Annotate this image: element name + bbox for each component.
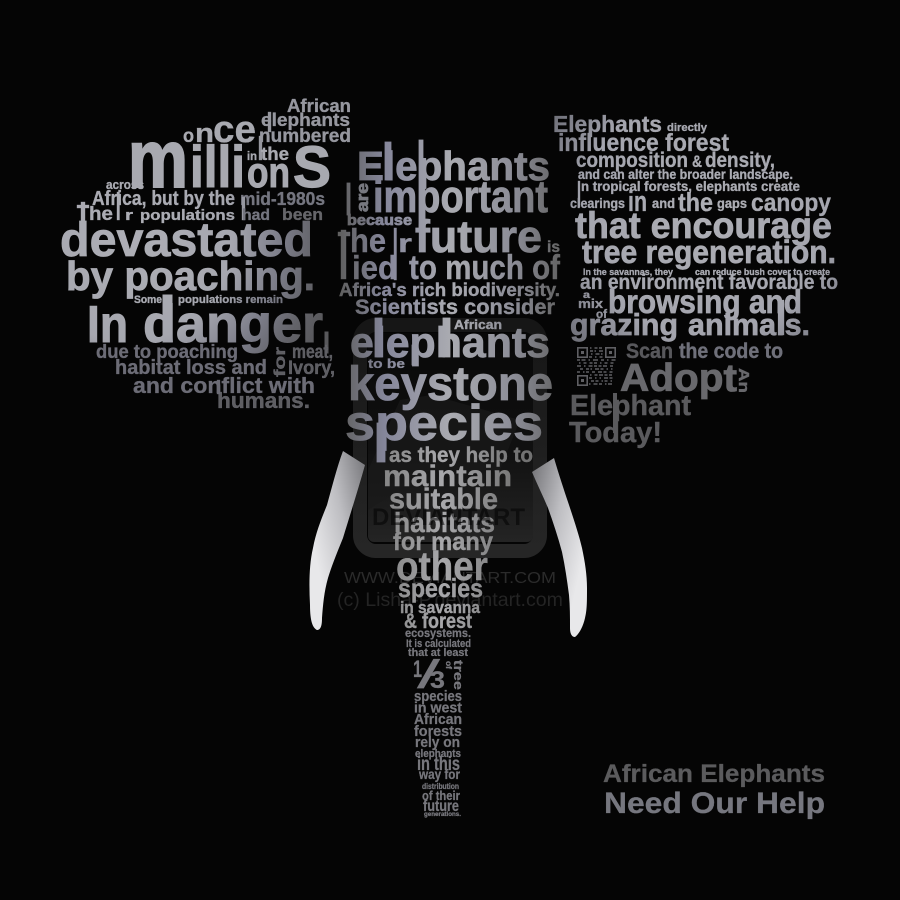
text: composition & density [576, 149, 800, 207]
headline: that encourage tree regeneration [575, 205, 836, 270]
panel: head text [338, 140, 561, 462]
figure: one third of tree: / [417, 653, 442, 697]
text: across Africa, but by the mid-1980s: mid-1980s [240, 189, 325, 209]
headline: elephants to be keystone species: to be [368, 356, 405, 371]
headline: a mix of browsing and grazing animals: browsing and [608, 283, 802, 320]
text: Africa's rich biodiversity. Scientists consider: African [454, 317, 502, 332]
text: elephants in this way for distribution of their future generations: in this [417, 754, 460, 775]
text: ecosystems. It is calculated that at least: ecosystems. [405, 626, 471, 640]
text: across Africa, but by the mid-1980s: Africa, but by the [92, 188, 235, 210]
headline: a mix of browsing and grazing animals [570, 283, 810, 342]
figure: one third of tree: of [444, 661, 453, 669]
headline: devastated by poaching: devastated [60, 214, 313, 267]
text: Some populations remain: Some [134, 294, 162, 306]
headline: that encourage tree regeneration: that encourage [575, 205, 832, 246]
headline: a mix of browsing and grazing animals: of [596, 307, 608, 321]
headline: Adopt An Elephant Today [569, 357, 752, 449]
headline: that encourage tree regeneration: tree regeneration. [582, 234, 836, 270]
heading: Elephants directly influence forest: influence forest [558, 129, 730, 157]
headline: a mix of browsing and grazing animals: mix [578, 296, 604, 311]
headline: once millions [128, 109, 331, 205]
headline: Adopt An Elephant Today: Today! [569, 417, 662, 449]
text: composition & density: composition [576, 149, 688, 172]
headline: a mix of browsing and grazing animals: grazing [570, 307, 678, 342]
heading: Elephants directly influence forest: directly [667, 122, 708, 134]
heading: African elephants numbered: numbered [259, 126, 351, 147]
headline: their future is tied to much of: ied [352, 249, 397, 286]
text: ecosystems. It is calculated that at least [405, 626, 471, 659]
headline: elephants to be keystone species [345, 318, 553, 462]
headline: once millions: n [195, 118, 214, 148]
headline: Elephants are important: are [353, 183, 372, 212]
headline: their future is tied to much of [338, 211, 561, 287]
headline: a mix of browsing and grazing animals: animals. [688, 307, 810, 342]
text: as they help to maintain suitable habitats: habitats [394, 507, 495, 538]
headline: elephants to be keystone species: keystone [348, 358, 553, 411]
headline: Elephants are important [347, 140, 550, 232]
figure: one third of tree: 3 [430, 667, 445, 694]
headline: once millions: the [261, 144, 289, 164]
headline: In danger: danger [143, 295, 323, 354]
text: clearings in and the gaps canopy [570, 186, 831, 218]
text: species in west African forests rely on: species [414, 688, 462, 705]
panel: left ear text [60, 96, 351, 413]
text: in savanna & forest [400, 598, 480, 633]
text: composition & density: & [692, 152, 702, 171]
headline: Adopt An Elephant Today: An [735, 368, 752, 393]
text: clearings in and the gaps canopy: gaps [717, 195, 747, 211]
text: clearings in and the gaps canopy: in [628, 186, 647, 218]
footer: call to action: Need Our Help [604, 787, 825, 820]
text: species in west African forests rely on: forests [414, 723, 462, 740]
headline: their future is tied to much of: r [398, 228, 412, 258]
text: Africa's rich biodiversity. Scientists consider: Scientists consider [355, 296, 555, 319]
headline: once millions: m [128, 114, 188, 205]
headline: Adopt An Elephant Today: Elephant [570, 390, 691, 422]
text: composition & density: n tropical forests, elephants create [581, 178, 800, 194]
headline: other species: other [396, 543, 488, 589]
text: across Africa, but by the mid-1980s [92, 177, 325, 210]
text: elephants in this way for distribution of their future generations: generations. [424, 812, 461, 818]
headline: once millions: in [247, 149, 257, 163]
text: as they help to maintain suitable habitats: for many [393, 528, 493, 556]
text: ecosystems. It is calculated that at least: It is calculated [406, 638, 471, 650]
headline: devastated by poaching [60, 214, 315, 299]
text: In the savannas, they can reduce bush cover: can reduce bush cover to create [695, 267, 830, 278]
figure: one third of tree: tree [451, 660, 466, 690]
text: across Africa, but by the mid-1980s: across [106, 177, 144, 192]
headline: Elephants are important: important [373, 171, 548, 222]
text: due to poaching for meat, ivory: Ivory, [288, 358, 335, 379]
right tusk [532, 458, 587, 637]
heading: Elephants directly influence forest [553, 111, 730, 157]
watermark url text [337, 570, 563, 611]
text: due to poaching for meat, ivory: meat, [292, 342, 333, 363]
text: their populations had been: had [242, 207, 270, 224]
footer: call to action [603, 760, 825, 820]
text: elephants in this way for distribution of their future generations: future [423, 798, 459, 815]
text: Africa's rich biodiversity. Scientists consider: Africa's rich biodiversity. [339, 280, 560, 300]
text: Scan the code to [626, 340, 783, 363]
heading: African elephants numbered: African [287, 96, 351, 116]
headline: once millions: ce [213, 109, 256, 151]
panel: adopt call to action [569, 340, 783, 449]
text: their populations had been: populations [140, 207, 235, 224]
panel: right ear text [553, 111, 838, 342]
headline: once millions: illi [190, 135, 245, 200]
text: due to poaching for meat, ivory: and conflict with [133, 373, 315, 398]
headline: other species: species [398, 573, 483, 603]
watermark url text: (c) Lisha-P.deviantart.com [337, 590, 563, 611]
text: in savanna & forest: in savanna [400, 598, 480, 617]
headline: once millions: S [293, 135, 331, 200]
left tusk [309, 451, 365, 630]
headline: elephants to be keystone species: species [345, 395, 543, 451]
headline: once millions: on [247, 149, 290, 197]
text: Scan the code to: the code to [679, 340, 783, 363]
headline: Elephants are important: Elephants [357, 143, 550, 189]
heading: African elephants numbered: elephants [261, 110, 350, 130]
text: Some populations remain: populations remain [178, 294, 283, 306]
text: clearings in and the gaps canopy: clearings [570, 195, 625, 211]
text: due to poaching for meat, ivory: due to poaching [96, 342, 238, 363]
watermark brand text: DEVIANTART [372, 504, 525, 531]
text: In the savannas, they can reduce bush cover: In the savannas, they [583, 267, 674, 278]
figure: one third of tree: 1 [413, 656, 422, 683]
text: composition & density: and can alter the broader landscape. [578, 166, 793, 182]
text: due to poaching for meat, ivory: humans. [217, 388, 310, 413]
headline: their future is tied to much of: to much of [409, 249, 561, 287]
text: their populations had been: he [89, 204, 113, 225]
headline: their future is tied to much of: he [350, 222, 386, 259]
headline: once millions: o [183, 126, 194, 147]
headline: elephants to be keystone species: elephants [350, 319, 550, 367]
panel: trunk text [405, 626, 471, 818]
text: clearings in and the gaps canopy: and [652, 195, 675, 211]
heading: Elephants directly influence forest: Elephants [553, 111, 662, 137]
text: as they help to maintain suitable habitats [383, 444, 533, 556]
text: Africa's rich biodiversity. Scientists consider [339, 280, 560, 332]
heading: African elephants numbered [259, 96, 351, 160]
text: as they help to maintain suitable habitats: suitable [389, 483, 498, 516]
text: species in west African forests rely on: rely on [415, 734, 460, 751]
headline: devastated by poaching: by poaching. [66, 253, 315, 299]
text: as they help to maintain suitable habitats: as they help to [389, 444, 533, 467]
headline: Adopt An Elephant Today: Adopt [620, 357, 737, 400]
icon: QR code [577, 348, 616, 385]
text: elephants in this way for distribution of their future generations: of their [422, 788, 460, 803]
text: their populations had been: r [125, 207, 133, 224]
text: elephants in this way for distribution of their future generations: way for [418, 766, 460, 782]
figure: one third of tree [413, 653, 466, 697]
text: elephants in this way for distribution of their future generations: elephants [415, 748, 461, 760]
text: due to poaching for meat, ivory [96, 342, 335, 413]
text: elephants in this way for distribution of their future generations: distribution [422, 782, 459, 791]
text: as they help to maintain suitable habitats: maintain [383, 460, 512, 493]
text: Some populations remain [134, 294, 283, 306]
watermark url text: WWW.DEVIANTART.COM [344, 570, 556, 587]
text: clearings in and the gaps canopy: canopy [751, 189, 831, 217]
headline: In danger: In [87, 296, 128, 354]
watermark frame [360, 325, 540, 551]
text: species in west African forests rely on: in west [414, 700, 462, 716]
text: composition & density: density, [705, 149, 775, 172]
headline: a mix of browsing and grazing animals: a [583, 290, 591, 301]
text: In the savannas, they can reduce bush cover: an environment favorable to [580, 271, 838, 294]
headline: their future is tied to much of: is [547, 239, 560, 256]
panel: lower head text [383, 444, 533, 633]
text: in savanna & forest: & forest [404, 610, 472, 633]
text: clearings in and the gaps canopy: the [678, 187, 713, 217]
text: elephants in this way for distribution of their future generations [415, 748, 461, 818]
text: due to poaching for meat, ivory: for [272, 347, 289, 377]
footer: call to action: African Elephants [603, 760, 825, 788]
text: species in west African forests rely on [414, 688, 462, 751]
text: ecosystems. It is calculated that at least: that at least [408, 647, 468, 659]
text: their populations had been: been [282, 205, 323, 224]
text: their populations had been [77, 192, 323, 254]
text: species in west African forests rely on: African [414, 711, 462, 728]
text: Scan the code to: Scan [626, 340, 673, 363]
headline: their future is tied to much of: future [415, 211, 542, 262]
text: due to poaching for meat, ivory: habitat loss and [115, 357, 267, 379]
headline: Elephants are important: because [347, 212, 412, 229]
